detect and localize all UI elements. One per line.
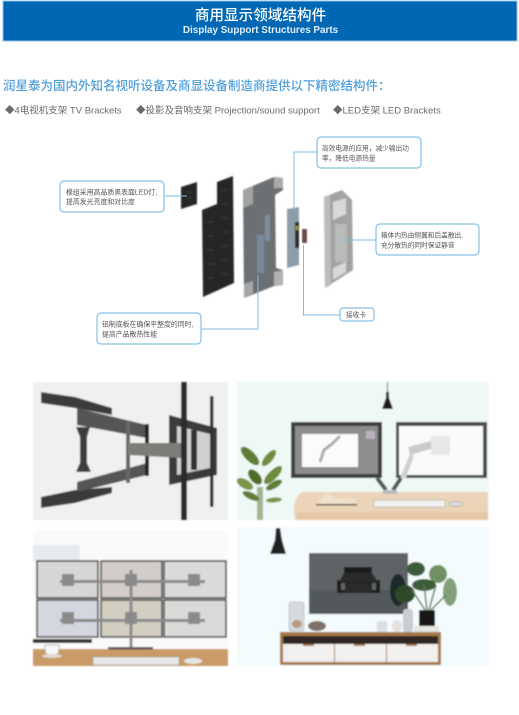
connector lines <box>164 152 376 329</box>
right monitor <box>396 422 487 478</box>
callout: LED module: 提高发光亮度和对比度 <box>66 197 135 206</box>
category: TV brackets: ◆4电视机支架 TV Brackets <box>5 104 122 116</box>
mouse <box>184 658 202 664</box>
decor items <box>308 621 326 631</box>
centre arm <box>128 443 182 458</box>
photo: dual monitor desk arm <box>235 382 489 520</box>
dark plant behind TV edge <box>390 574 406 606</box>
callout: aluminium base: 铝制底板在确保平整度的同时, <box>102 320 194 328</box>
LED module: large black panel <box>202 176 234 297</box>
aluminium base plate <box>243 177 283 298</box>
desk <box>294 492 488 520</box>
upper link arm <box>77 408 147 438</box>
product category list <box>5 104 441 116</box>
callout: receiving card <box>340 308 374 321</box>
callout: aluminium base: 提高产品散热性能 <box>102 330 157 338</box>
exploded LED display diagram <box>60 137 479 344</box>
category: LED brackets: ◆LED支架 LED Brackets <box>333 104 441 116</box>
callout: aluminium base <box>97 313 201 344</box>
vertical rails <box>181 382 187 520</box>
lower grip arm <box>41 487 112 508</box>
callout: power supply <box>317 137 421 168</box>
TV cabinet <box>280 632 441 665</box>
table <box>33 649 228 666</box>
receiving card <box>302 229 307 243</box>
callout: power supply: 率，降低电源热量 <box>322 154 376 162</box>
callout: receiving card: 接收卡 <box>346 310 366 319</box>
stand base <box>108 647 153 650</box>
banner subtitle: Display Support Structures Parts <box>183 25 339 36</box>
intro heading: 润星泰为国内外知名视听设备及商显设备制造商提供以下精密结构件： <box>3 78 391 93</box>
open book <box>316 493 356 505</box>
monitor arms <box>377 478 401 490</box>
mount arms <box>60 570 205 648</box>
lower link arm <box>77 463 147 492</box>
plant pot <box>419 610 435 626</box>
upper grip arm <box>41 392 112 415</box>
plant <box>257 487 263 520</box>
photo: TV wall mount in living room <box>237 527 489 666</box>
bracket <box>337 567 380 593</box>
monitors <box>37 561 226 637</box>
callout: rear cover <box>376 224 479 255</box>
photo: articulated TV wall mount <box>33 382 228 520</box>
banner title: 商用显示领域结构件 <box>195 7 326 24</box>
plant leaves <box>407 562 425 576</box>
photo: six monitor stand <box>33 530 228 666</box>
header banner <box>3 1 517 41</box>
LED module: small black panel <box>181 182 197 209</box>
category: projection and sound: ◆投影及音响支架 Projection/sound support <box>136 104 320 116</box>
mounting plate <box>169 415 217 485</box>
callout: LED module <box>60 181 164 212</box>
rear cover <box>324 190 353 288</box>
glass vase <box>289 602 304 631</box>
left monitor <box>291 422 382 478</box>
strip <box>33 639 92 643</box>
callout: rear cover: 充分散热的同时保证静音 <box>381 240 455 250</box>
pendant lamp <box>270 528 286 554</box>
callout: power supply: 高效电源的应用，减少输出功 <box>322 144 409 152</box>
callout: LED module: 模组采用高品质黑表面LED灯, <box>66 188 157 196</box>
window <box>33 545 80 561</box>
mouse <box>449 502 463 506</box>
coffee cup <box>45 645 59 655</box>
pendant lamp <box>386 382 388 392</box>
keyboard <box>93 657 179 665</box>
TV screen <box>309 553 408 614</box>
callout: rear cover: 箱体内热由侧翼和后盖散出, <box>381 230 463 240</box>
power supply <box>287 207 299 268</box>
keyboard <box>374 500 445 507</box>
pivot column <box>76 427 91 472</box>
